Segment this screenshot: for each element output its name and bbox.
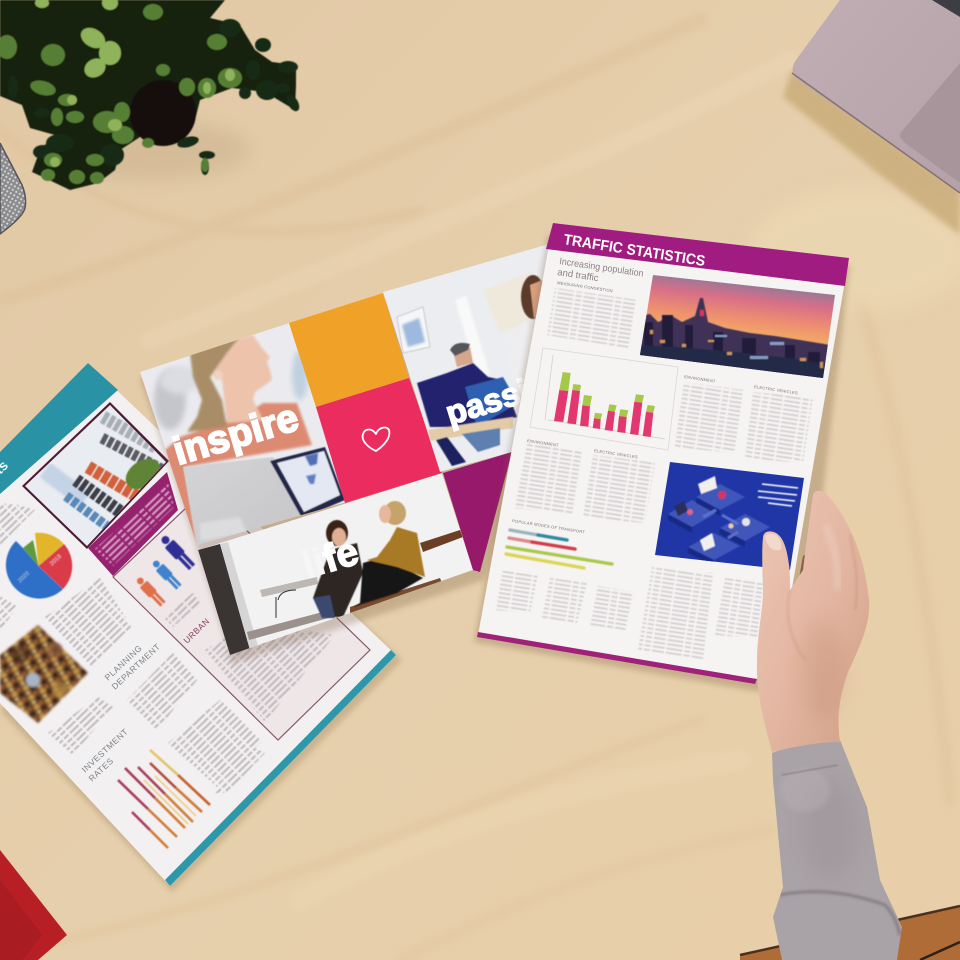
- caption text lines: [95, 483, 174, 566]
- panel: passion photo: [383, 243, 552, 472]
- crowd photo: [0, 625, 88, 723]
- bar chart: investment rates: [118, 750, 210, 848]
- pie chart: 2018: [49, 553, 63, 567]
- small heading: environment lower: ENVIRONMENT: [527, 438, 559, 448]
- bar chart: traffic volumes: [530, 348, 678, 450]
- potted plant: [0, 0, 302, 190]
- small heading: electric vehicles top: ELECTRIC VEHICLES: [754, 384, 798, 396]
- heading: urban: URBAN: [181, 616, 212, 645]
- middle brochure shadow: [140, 250, 550, 664]
- building photo: [20, 400, 170, 550]
- horizontal bars: popular modes of transport: [506, 530, 612, 568]
- desk wood trim and table edge: [740, 906, 960, 960]
- city skyline photo: [640, 275, 835, 378]
- panel: life photo: [198, 473, 473, 655]
- heading line: department: DEPARTMENT: [110, 641, 162, 691]
- purple bottom strip: [477, 632, 757, 684]
- teal bottom strip: [165, 650, 396, 886]
- title: TRAFFIC STATISTICS: [562, 231, 706, 270]
- sleeve: grey sweater: [772, 740, 902, 960]
- small heading: popular modes of transport: POPULAR MODES OF TRANSPORT: [512, 518, 586, 535]
- red folder corner: [0, 850, 67, 960]
- panel: inspire photo: [140, 323, 347, 545]
- heading line: planning: PLANNING: [103, 643, 144, 682]
- word: life: life: [297, 530, 364, 588]
- laptop shadow: [783, 70, 960, 235]
- orange panel: [289, 293, 409, 407]
- page: [478, 223, 849, 683]
- pie chart: [6, 533, 72, 599]
- rose text panel: [113, 490, 370, 740]
- body text lines: [0, 503, 335, 793]
- small heading: environment top: ENVIRONMENT: [684, 374, 716, 384]
- pink panel: [316, 378, 442, 503]
- purple caption box: [88, 472, 178, 576]
- word: passion: passion: [441, 360, 571, 432]
- small heading: measuring congestion: MEASURING CONGESTION: [557, 280, 613, 293]
- word: inspire: inspire: [168, 396, 303, 474]
- panel: middle brochure: [140, 243, 571, 655]
- pie chart: 2020: [17, 570, 31, 584]
- metal mesh basket: [0, 143, 26, 234]
- left brochure shadow: [0, 470, 402, 892]
- heading line: investment: INVESTMENT: [80, 726, 130, 774]
- purple header band: [546, 223, 849, 286]
- purple triangle panel: [443, 452, 512, 572]
- laptop corner: [792, 0, 960, 193]
- hand holding the page: [757, 491, 869, 752]
- isometric illustration on blue panel: [655, 462, 804, 570]
- body text blocks: [495, 288, 813, 660]
- plant shadow: [50, 120, 250, 180]
- teal header band: [0, 363, 118, 494]
- heading line: rates: RATES: [87, 756, 115, 783]
- right brochure shadow: [474, 235, 850, 692]
- subheading line 1: Increasing population: [559, 256, 644, 280]
- small heading: electric vehicles lower: ELECTRIC VEHICLES: [594, 448, 638, 460]
- panel: right brochure, traffic statistics: [477, 223, 849, 684]
- subheading line 2: and traffic: [557, 267, 600, 284]
- icon: heart: [363, 427, 389, 451]
- page: [0, 363, 396, 886]
- people icons: [134, 533, 196, 608]
- panel: left brochure: [0, 363, 396, 886]
